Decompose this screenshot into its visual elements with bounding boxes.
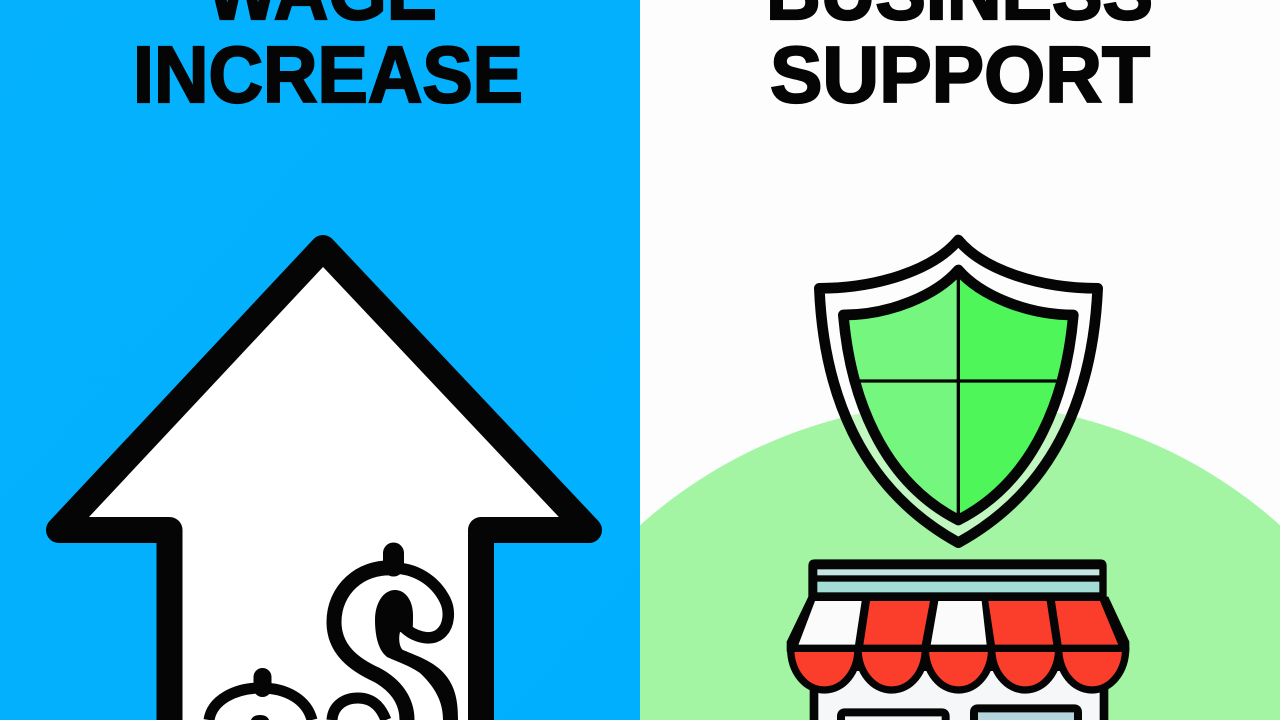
store window right — [974, 708, 1078, 720]
icon: up arrow with dollar signs — [59, 248, 589, 720]
icon: large dollar sign — [334, 553, 458, 720]
icon: small dollar sign — [209, 677, 386, 720]
panel: wage increase — [0, 0, 640, 720]
store window left — [841, 712, 946, 720]
store body — [814, 667, 1104, 720]
icon: storefront — [787, 559, 1129, 720]
awning — [787, 597, 1129, 690]
heading: wage increase: INCREASE — [133, 30, 523, 119]
panel: business support — [640, 0, 1280, 720]
icon: shield — [819, 240, 1098, 543]
sign board — [808, 559, 1107, 600]
heading: business support: SUPPORT — [770, 30, 1150, 119]
green hill background — [640, 403, 1280, 720]
